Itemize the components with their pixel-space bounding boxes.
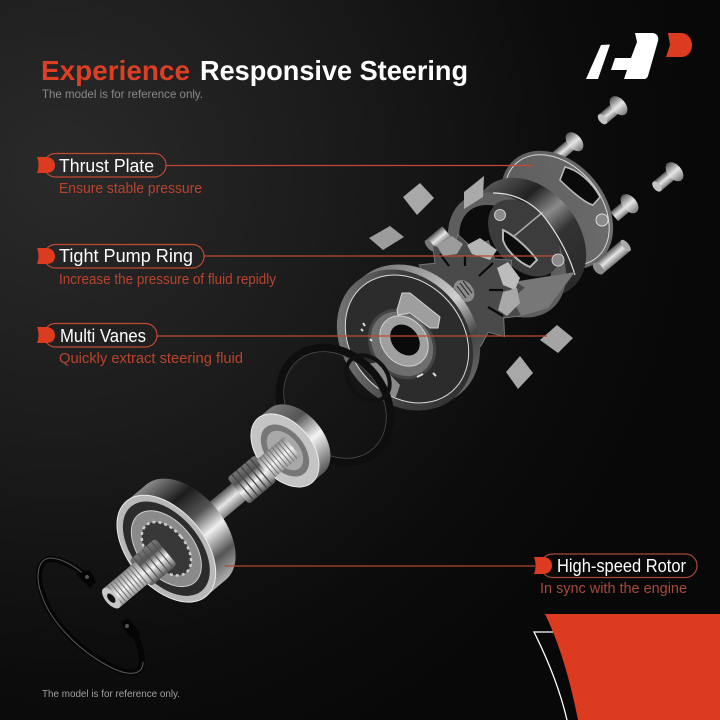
thrust plate drum: [451, 129, 636, 318]
callout: tight pump ring: Increase the pressure of fluid repidly: [59, 272, 277, 288]
callout: high-speed rotor: In sync with the engine: [540, 581, 687, 597]
pump ring: [424, 169, 590, 341]
white corner outline: [534, 632, 567, 720]
callout: thrust plate: [37, 154, 533, 197]
roller pin lower right: [591, 238, 633, 277]
o-ring: [257, 325, 413, 485]
title: Responsive Steering: [200, 55, 468, 86]
callout: multi vanes: Quickly extract steering fluid: [59, 351, 243, 367]
slot: [560, 167, 600, 205]
pin: right: [607, 191, 642, 225]
callout: high-speed rotor: [225, 554, 697, 597]
callout: multi vanes: [37, 324, 547, 367]
reference note top: The model is for reference only.: [42, 87, 203, 101]
small pin left: [423, 226, 451, 253]
title: Experience: [41, 55, 190, 86]
vane pieces: [369, 176, 573, 389]
title: [41, 55, 468, 86]
callout: tight pump ring: [37, 244, 553, 288]
callout: thrust plate: Thrust Plate: [59, 156, 154, 176]
logo: [586, 33, 692, 79]
exploded assembly: [38, 93, 687, 673]
pin: far right: [647, 159, 687, 197]
main axis group: [65, 375, 356, 648]
pin: top right: [593, 93, 631, 130]
rotor with vanes: [394, 213, 546, 367]
large bearing: [97, 460, 255, 621]
circlip: [38, 558, 143, 673]
callout: thrust plate: Ensure stable pressure: [59, 181, 202, 197]
small bearing: [237, 391, 344, 500]
callout: multi vanes: Multi Vanes: [60, 326, 146, 346]
pin: top: [549, 129, 587, 166]
drum band: [451, 156, 609, 318]
front plate: [309, 237, 508, 438]
callout: tight pump ring: Tight Pump Ring: [59, 246, 193, 266]
rotor shaft: [172, 433, 303, 550]
threaded shaft end: [95, 538, 177, 615]
red corner panel: [545, 614, 720, 720]
callout: high-speed rotor: High-speed Rotor: [557, 556, 686, 576]
reference note bottom: The model is for reference only.: [42, 688, 180, 700]
